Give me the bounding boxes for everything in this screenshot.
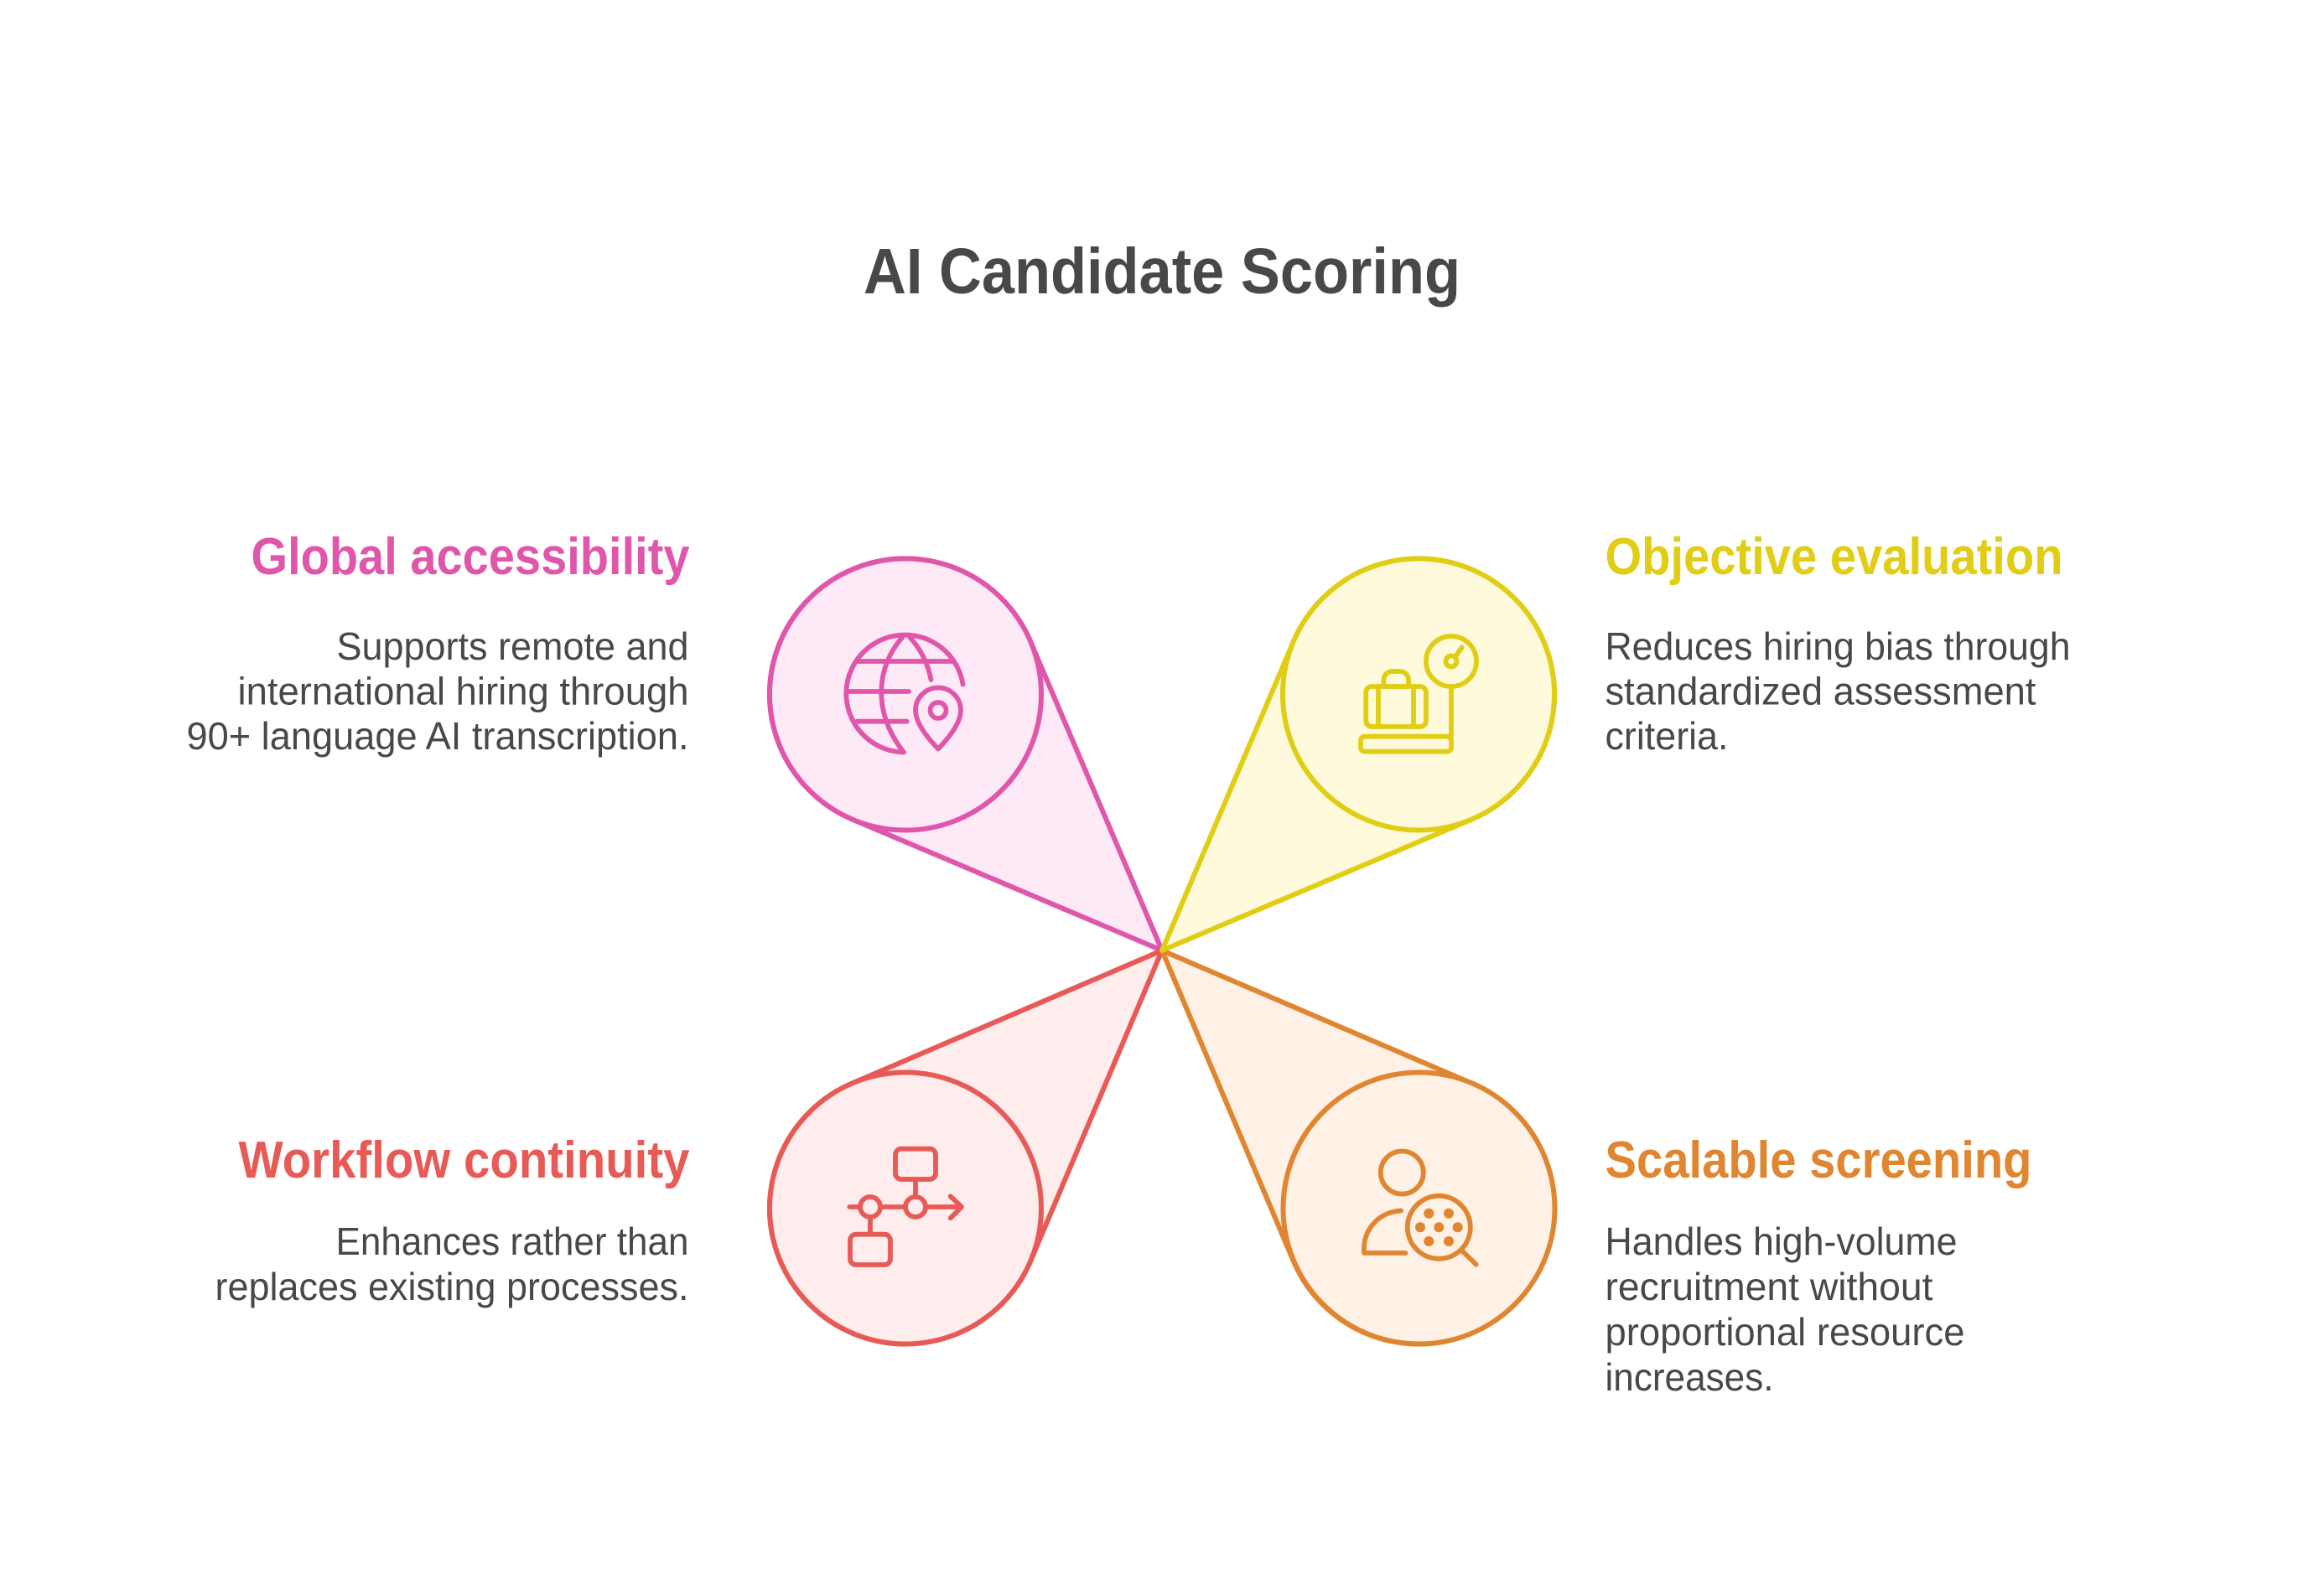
petal: red teardrop — [770, 950, 1162, 1344]
text block: workflow continuity — [215, 1219, 689, 1308]
text block: scalable screening: proportional resource — [1605, 1310, 1965, 1354]
petal: orange teardrop — [1162, 950, 1554, 1344]
heading: scalable screening: Scalable screening — [1605, 1131, 2032, 1189]
icon: globe with location pin — [846, 635, 962, 753]
petal: yellow teardrop — [1162, 559, 1554, 950]
icon: luggage scale — [1361, 636, 1476, 752]
circle: pink — [770, 558, 1041, 830]
heading: global accessibility: Global accessibility — [252, 528, 690, 586]
circle: red — [770, 1073, 1041, 1344]
panel: scalable screening — [1162, 950, 2032, 1399]
circle: yellow — [1283, 558, 1554, 830]
panel: objective evaluation — [1162, 528, 2071, 950]
text block: scalable screening — [1605, 1219, 1965, 1399]
text block: workflow continuity: replaces existing processes. — [215, 1265, 689, 1308]
text block: global accessibility: 90+ language AI transcription. — [186, 714, 689, 758]
text block: objective evaluation — [1605, 624, 2071, 758]
text block: global accessibility: Supports remote and — [337, 624, 689, 668]
icon: process flow — [849, 1149, 962, 1265]
text block: scalable screening: recruitment without — [1605, 1265, 1933, 1308]
text block: objective evaluation: criteria. — [1605, 714, 1729, 758]
heading: objective evaluation: Objective evaluation — [1605, 528, 2062, 586]
text block: global accessibility: international hiring through — [238, 669, 689, 712]
circle: orange — [1283, 1073, 1554, 1344]
text block: scalable screening: increases. — [1605, 1355, 1774, 1399]
icon: person under magnifier — [1364, 1152, 1476, 1265]
text block: global accessibility — [186, 624, 689, 758]
text block: objective evaluation: Reduces hiring bias through — [1605, 624, 2071, 668]
text block: objective evaluation: standardized assessment — [1605, 669, 2036, 712]
title: AI Candidate Scoring — [864, 236, 1460, 308]
petal: pink teardrop — [770, 559, 1162, 950]
text block: scalable screening: Handles high-volume — [1605, 1219, 1957, 1263]
panel: workflow continuity — [215, 950, 1162, 1344]
text block: workflow continuity: Enhances rather than — [335, 1219, 689, 1263]
heading: workflow continuity: Workflow continuity — [238, 1131, 690, 1189]
panel: global accessibility — [186, 528, 1162, 950]
